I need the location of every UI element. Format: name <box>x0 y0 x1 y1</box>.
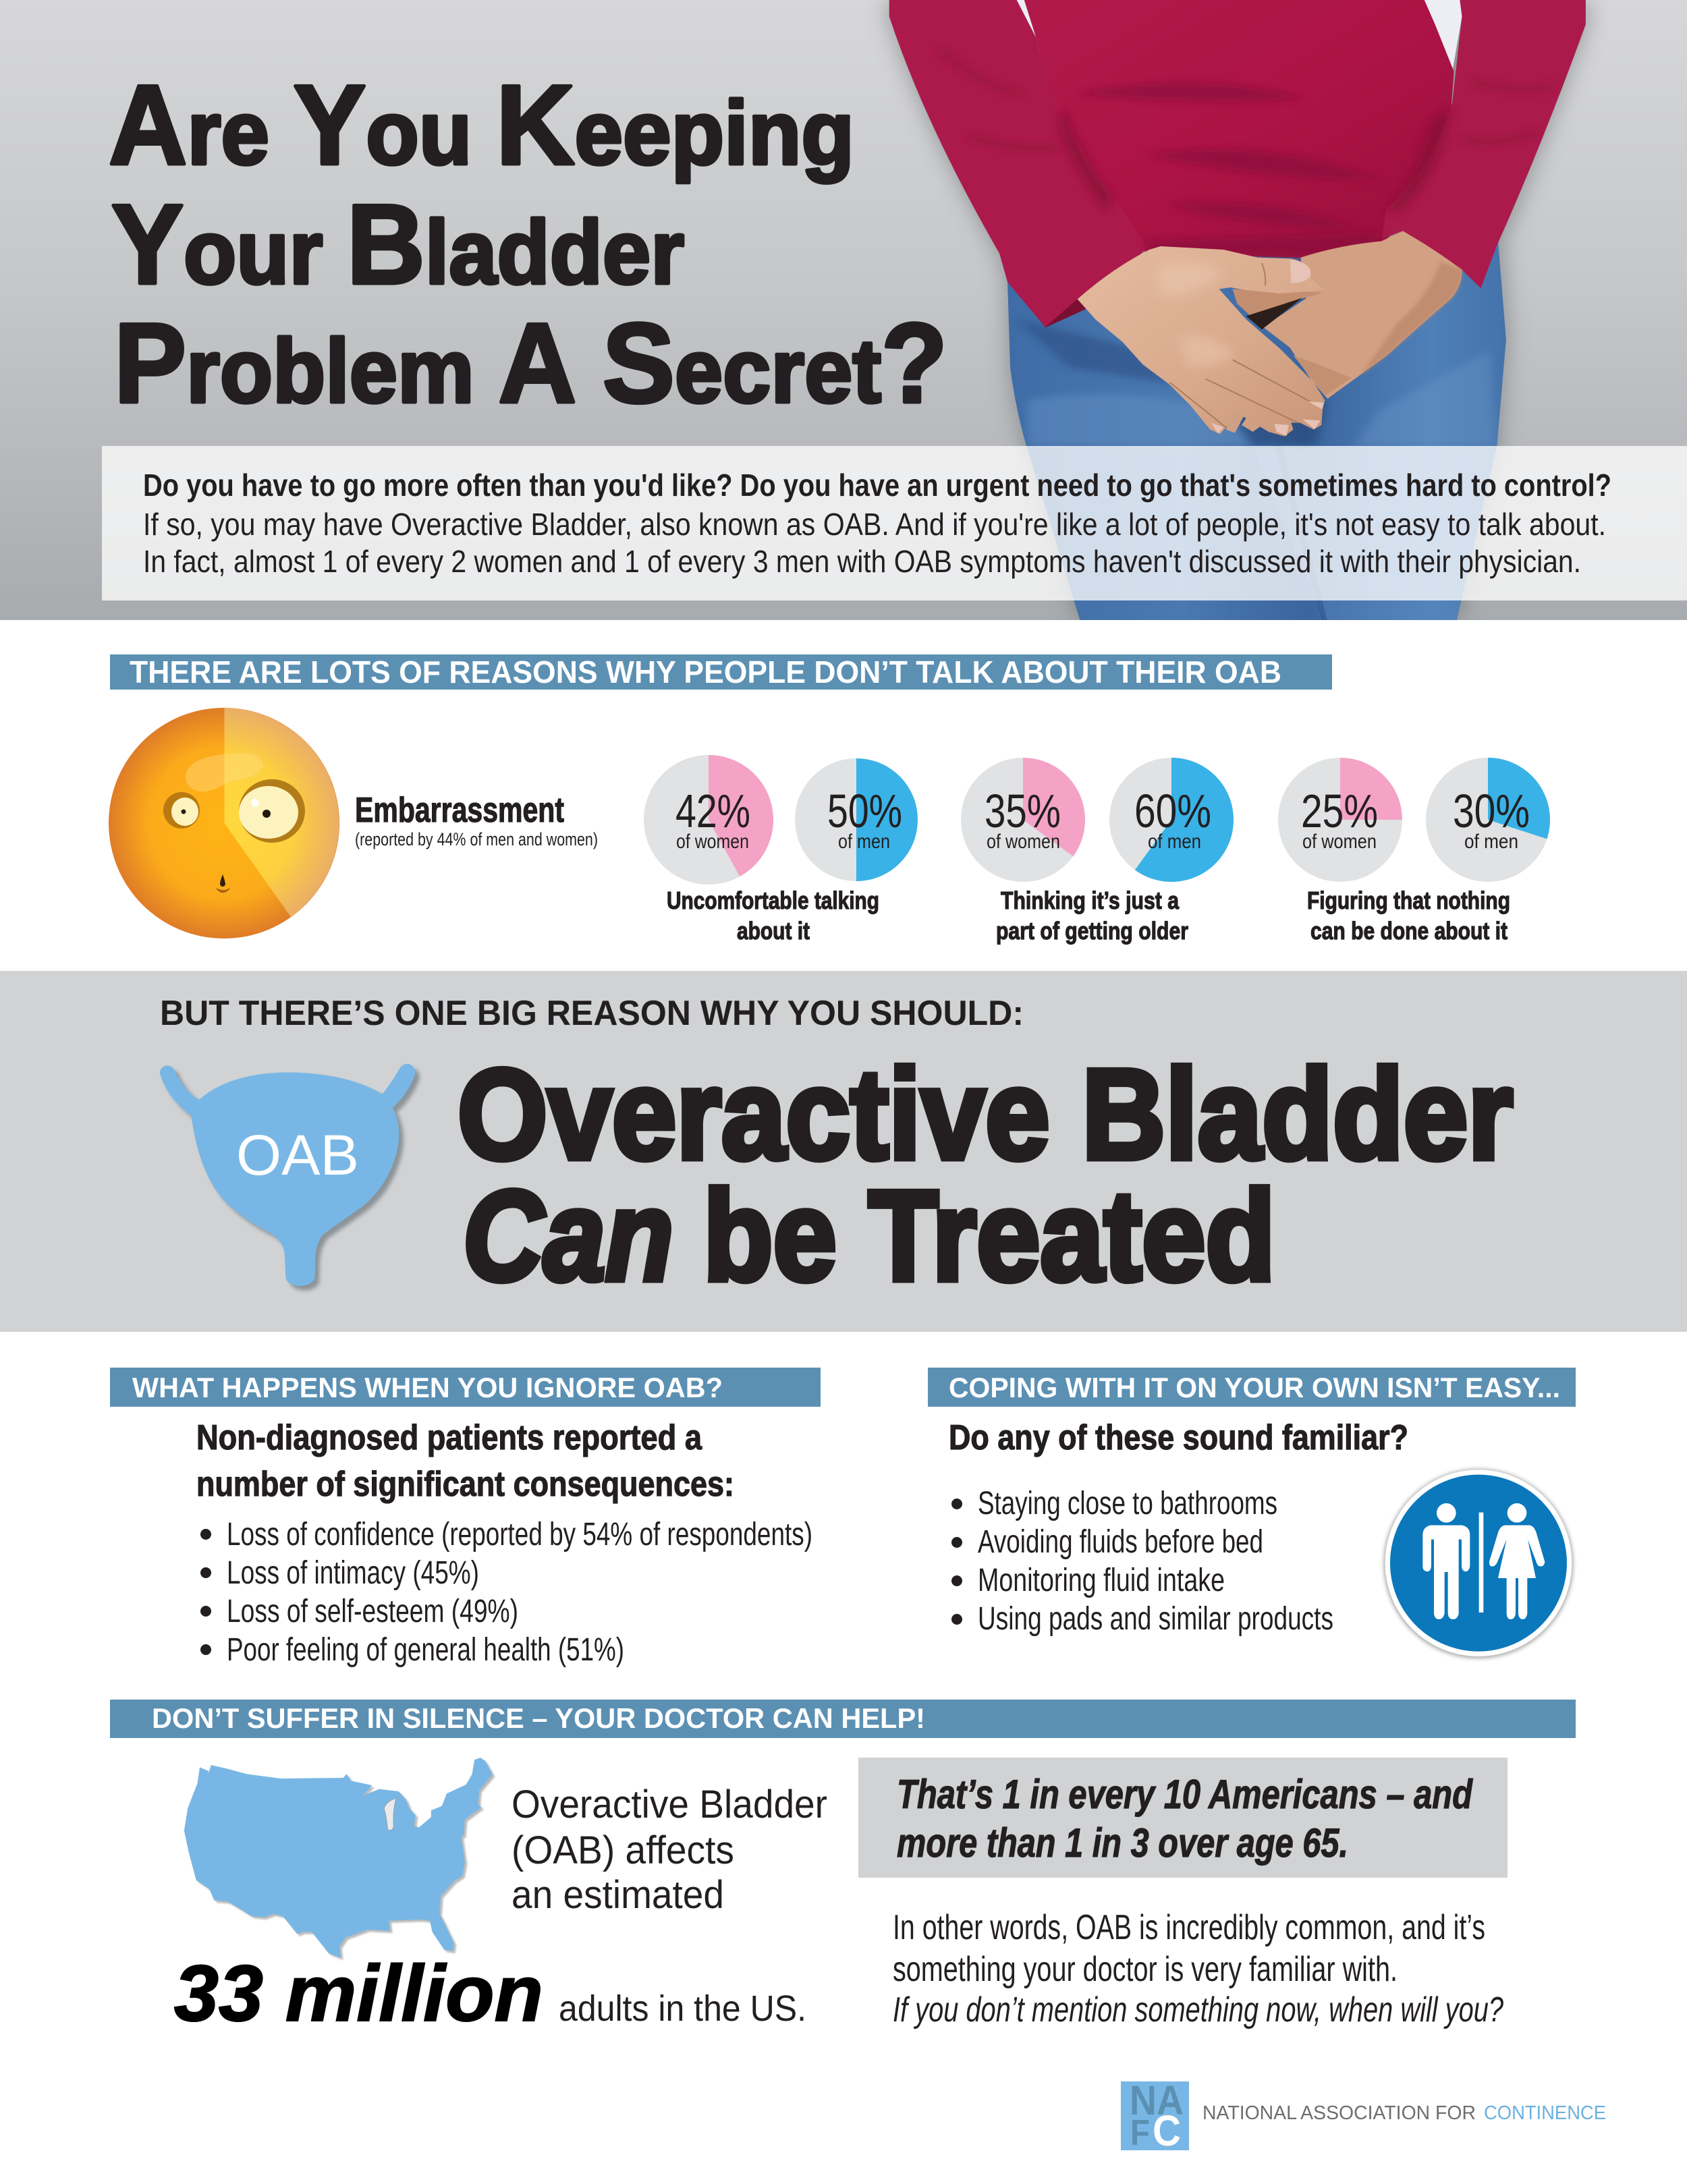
chart: nothing can be done, women 25%: of women <box>1302 831 1377 853</box>
list: coping behaviours: Monitoring fluid intake <box>978 1563 1225 1598</box>
list: coping behaviours: Avoiding fluids before bed <box>978 1524 1263 1560</box>
headline: overactive bladder can be treated: Overactive Bladder <box>458 1043 1513 1186</box>
label: embarrassment: Embarrassment <box>355 791 564 830</box>
headline: overactive bladder can be treated: be Treated <box>703 1165 1275 1308</box>
list: consequences: Loss of confidence (reported by 54% of respondents) <box>227 1517 812 1552</box>
text: OAB affects: Overactive Bladder <box>511 1783 827 1826</box>
chart: uncomfortable talking, women 42%: 42% <box>675 785 750 837</box>
title: Are You Keeping <box>109 61 854 188</box>
subheading: consequences: number of significant consequences: <box>196 1465 734 1504</box>
list: coping behaviours: Using pads and similar products <box>978 1601 1333 1637</box>
title <box>109 61 947 426</box>
text: OAB affects: (OAB) affects <box>511 1828 734 1872</box>
title: Your Bladder <box>111 181 684 308</box>
icon: embarrassed face <box>109 708 339 939</box>
section heading: doctor can help <box>110 1700 1576 1738</box>
caption: uncomfortable talking: Uncomfortable talking <box>667 887 879 914</box>
title: Problem A Secret? <box>114 300 947 426</box>
callout: 1 in 10 Americans <box>858 1758 1508 1878</box>
icon: bladder: OAB <box>236 1123 359 1187</box>
subheading: familiar: Do any of these sound familiar? <box>949 1418 1408 1457</box>
label: embarrassment: (reported by 44% of men and women) <box>355 829 598 849</box>
logo: NAFC: CONTINENCE <box>1484 2102 1606 2124</box>
panel: one big reason band <box>0 971 1687 1332</box>
chart: nothing can be done, men 30%: of men <box>1464 831 1518 853</box>
chart: uncomfortable talking, men 50%: of men <box>838 831 890 853</box>
logo: NAFC: F <box>1130 2112 1150 2153</box>
chart: getting older, men 60% <box>1109 758 1234 882</box>
callout: 1 in 10 Americans: more than 1 in 3 over age 65. <box>897 1820 1348 1866</box>
text: OAB affects <box>511 1783 827 1917</box>
list: consequences: Loss of self-esteem (49%) <box>227 1594 518 1629</box>
list: coping behaviours <box>951 1486 1333 1637</box>
subheading: consequences: Non-diagnosed patients reported a <box>196 1418 702 1457</box>
section heading: reasons: THERE ARE LOTS OF REASONS WHY PEOPLE DON’T TALK ABOUT THEIR OAB <box>130 654 1281 690</box>
section heading: coping: COPING WITH IT ON YOUR OWN ISN’T EASY... <box>949 1372 1560 1403</box>
list: consequences: Loss of intimacy (45%) <box>227 1555 479 1591</box>
chart: nothing can be done, women 25%: 25% <box>1301 785 1378 837</box>
headline: overactive bladder can be treated: Can <box>463 1165 673 1308</box>
caption: nothing can be done: can be done about it <box>1310 917 1508 945</box>
caption: uncomfortable talking: about it <box>737 917 810 945</box>
icon: bladder <box>160 1064 420 1291</box>
callout: 1 in 10 Americans: That’s 1 in every 10 Americans – and <box>897 1772 1473 1817</box>
text: doctor is familiar: If you don’t mention something now, when will you? <box>893 1990 1503 2029</box>
logo: NAFC: C <box>1153 2106 1181 2155</box>
heading: one big reason: BUT THERE’S ONE BIG REASON WHY YOU SHOULD: <box>160 994 1024 1033</box>
statistic: 33 million adults: adults in the US. <box>559 1988 806 2029</box>
chart: getting older, women 35% <box>961 758 1085 882</box>
logo: NAFC: NA <box>1130 2077 1184 2123</box>
caption: nothing can be done: Figuring that nothing <box>1307 887 1510 914</box>
label: embarrassment <box>355 791 598 849</box>
caption: getting older <box>996 887 1188 945</box>
caption: getting older: Thinking it’s just a <box>1001 887 1180 914</box>
section heading: ignore OAB <box>110 1368 821 1407</box>
caption: nothing can be done <box>1307 887 1510 945</box>
logo: NAFC: NATIONAL ASSOCIATION FOR <box>1202 2102 1476 2124</box>
subheading: consequences <box>196 1418 734 1504</box>
chart: uncomfortable talking, men 50% <box>795 758 918 881</box>
chart: getting older, men 60%: 60% <box>1134 785 1211 837</box>
list: coping behaviours: Staying close to bathrooms <box>978 1486 1277 1521</box>
chart: getting older, women 35%: of women <box>987 831 1060 853</box>
list: consequences <box>200 1517 812 1668</box>
chart: uncomfortable talking, men 50%: 50% <box>827 785 902 837</box>
statistic: 33 million adults <box>174 1949 806 2038</box>
list: consequences: Poor feeling of general health (51%) <box>227 1632 624 1668</box>
headline: overactive bladder can be treated <box>458 1043 1513 1308</box>
icon: US map <box>184 1758 495 1960</box>
icon: restroom sign <box>1383 1469 1574 1658</box>
chart: nothing can be done, women 25% <box>1278 758 1402 882</box>
panel: header background <box>0 0 1687 620</box>
chart: uncomfortable talking, women 42% <box>644 755 773 885</box>
section heading: ignore OAB: WHAT HAPPENS WHEN YOU IGNORE OAB? <box>132 1372 723 1403</box>
chart: nothing can be done, men 30% <box>1426 758 1550 882</box>
text: OAB affects: an estimated <box>511 1873 724 1917</box>
text: doctor is familiar: In other words, OAB is incredibly common, and it’s <box>893 1908 1485 1947</box>
text: doctor is familiar <box>893 1908 1503 2029</box>
photo: woman holding her bladder <box>889 0 1586 621</box>
logo: NAFC <box>1121 2077 1606 2155</box>
panel: intro text box <box>102 446 1687 600</box>
caption: getting older: part of getting older <box>996 917 1188 945</box>
chart: nothing can be done, men 30%: 30% <box>1453 785 1530 837</box>
chart: getting older, men 60%: of men <box>1148 831 1201 853</box>
chart: uncomfortable talking, women 42%: of women <box>676 831 749 853</box>
caption: uncomfortable talking <box>667 887 879 945</box>
text: doctor is familiar: something your doctor is very familiar with. <box>893 1950 1398 1989</box>
section heading: doctor can help: DON’T SUFFER IN SILENCE – YOUR DOCTOR CAN HELP! <box>152 1702 925 1734</box>
statistic: 33 million adults: 33 million <box>174 1949 543 2038</box>
chart: getting older, women 35%: 35% <box>985 785 1061 837</box>
